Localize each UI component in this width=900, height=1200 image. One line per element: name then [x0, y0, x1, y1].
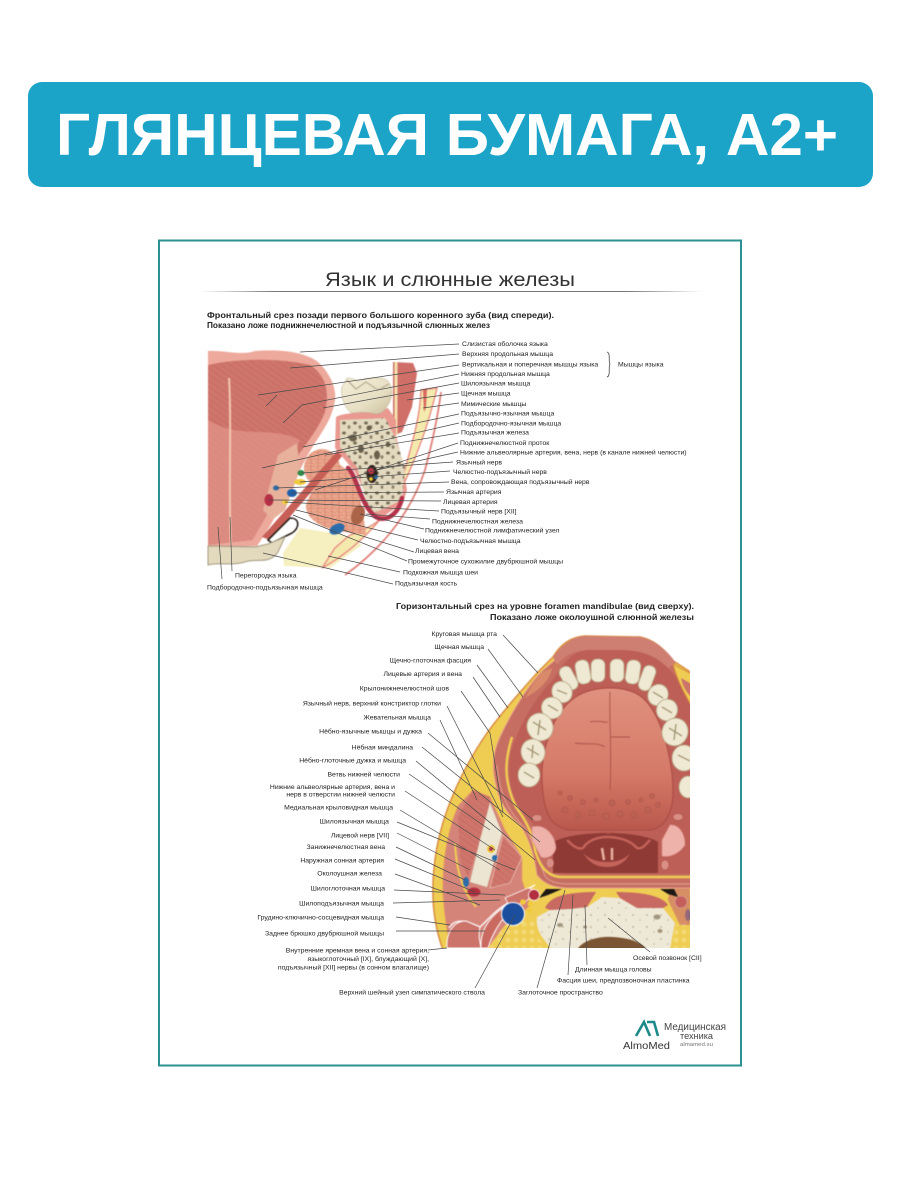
medial pterygoid — [490, 835, 522, 888]
cheek muscle — [393, 362, 417, 436]
labels: horizontal section: языкоглоточный [IX], блуждающий [X], — [307, 955, 429, 963]
labels: bottom of horizontal section — [518, 954, 702, 996]
labels: horizontal section: Крылонижнечелюстной шов — [360, 684, 449, 692]
labels: frontal section: Лицевая вена — [415, 548, 459, 555]
labels: horizontal section: Щечно-глоточная фасция — [390, 658, 471, 664]
spinal canal — [578, 936, 646, 948]
leader lines: frontal section — [218, 344, 459, 584]
muscle strip — [504, 887, 534, 905]
hyoid bone — [208, 537, 285, 565]
left cheek fat island — [525, 668, 552, 698]
right tonsil — [662, 825, 685, 856]
labels: frontal section: Шилоязычная мышца — [461, 380, 531, 388]
labels: bottom of horizontal section: Осевой позвонок [CII] — [633, 954, 702, 962]
labels: frontal section: Слизистая оболочка языка — [462, 340, 548, 348]
masseter — [458, 790, 490, 877]
labels: horizontal section: Нёбно-глоточные дужка и мышца — [299, 756, 406, 764]
left tonsil — [532, 826, 556, 858]
right cheek fat island — [672, 663, 690, 705]
labels: frontal section: Поднижнечелюстной проток — [460, 439, 550, 447]
labels: frontal section: Поднижнечелюстной лимфатический узел — [425, 526, 559, 534]
mylohyoid — [262, 442, 350, 540]
labels: frontal section: Лицевая артерия — [443, 499, 498, 506]
fat at carotid sheath — [488, 918, 548, 948]
carotid sheath vessels — [502, 902, 524, 926]
labels: frontal section: Щечная мышца — [461, 390, 511, 398]
labels: frontal section: Вена, сопровождающая подъязычный нерв — [451, 478, 590, 486]
labels: bottom of horizontal section: Длинная мышца головы — [575, 966, 652, 974]
poster title: Язык и слюнные железы — [325, 269, 575, 291]
heading: horizontal section: Горизонтальный срез на уровне foramen mandibulae (вид сверху). — [396, 602, 694, 611]
septum — [229, 378, 231, 545]
labels: horizontal section: Щечная мышца — [434, 644, 484, 651]
labels: frontal section: Подъязычная железа — [461, 430, 529, 436]
mandibular canal — [366, 465, 378, 483]
red muscle curve — [348, 468, 402, 519]
labels: horizontal section: Язычный нерв, верхний констриктор глотки — [303, 700, 441, 708]
poster frame — [159, 240, 741, 1066]
labels: horizontal section: Нёбная миндалина — [352, 744, 413, 752]
brace: tongue muscles — [607, 352, 664, 377]
labels: horizontal section: Жевательная мышца — [364, 714, 431, 722]
labels: frontal section: Промежуточное сухожилие двубрюшной мышцы — [408, 558, 563, 566]
cream subcutaneous band — [322, 388, 437, 568]
labels: frontal section — [207, 340, 687, 592]
heading: frontal section — [207, 311, 554, 330]
labels: horizontal section: Круговая мышца рта — [431, 631, 497, 638]
labels: horizontal section: Внутренние яремная вена и сонная артерия, — [286, 948, 429, 954]
logo: AlmaMed — [623, 1022, 726, 1052]
labels: bottom of horizontal section: Фасция шеи, предпозвоночная пластинка — [557, 978, 690, 984]
retromandibular vein and external carotid — [463, 877, 469, 887]
platysma stripe — [345, 392, 441, 575]
mandibular ramus — [470, 803, 502, 887]
pale yellow submental fat — [283, 528, 362, 568]
tongue — [542, 688, 673, 830]
banner heading: ГЛЯНЦЕВАЯ БУМАГА, А2+ — [56, 102, 838, 168]
labels: horizontal section: Нёбно-язычные мышцы и дужка — [319, 728, 422, 736]
labels: horizontal section: Шилоподъязычная мышца — [299, 900, 384, 908]
illustration: horizontal section, view from above — [433, 636, 697, 950]
logo: AlmaMed: техника — [680, 1031, 714, 1042]
labels: frontal section: Вертикальная и поперечная мышцы языка — [462, 362, 598, 368]
lip — [553, 636, 676, 668]
vertebra pores — [557, 914, 662, 933]
labels: horizontal section: Лицевой нерв [VII] — [331, 832, 389, 840]
vertebra C2 — [537, 897, 675, 950]
labels: frontal section: Челюстно-подъязычный нерв — [453, 468, 547, 476]
labels: horizontal section — [257, 631, 497, 996]
buccal muscle wall — [493, 639, 695, 888]
labels: frontal section: Подъязычный нерв [XII] — [441, 508, 517, 516]
labels: bottom of horizontal section: Заглоточное пространство — [518, 990, 603, 996]
illustration: frontal section of tongue and jaw — [208, 350, 441, 575]
facial vein — [328, 521, 346, 537]
labels: frontal section: Верхняя продольная мышца — [462, 351, 553, 358]
tooth crown — [342, 378, 392, 414]
labels: frontal section: Подъязычная кость — [395, 580, 458, 588]
sublingual gland — [304, 449, 340, 487]
labels: horizontal section: Околоушная железа — [317, 870, 382, 878]
parotid and deep neck muscles — [443, 790, 530, 948]
logo: AlmaMed: AlmoMed — [623, 1040, 670, 1052]
teeth — [518, 659, 697, 798]
lingual vessel bed — [263, 443, 300, 520]
prevertebral muscles — [545, 892, 596, 910]
labels: frontal section: Язычный нерв — [456, 458, 502, 466]
tongue papillae — [558, 791, 660, 819]
leader lines: horizontal section — [393, 635, 650, 988]
icon: logo mark — [636, 1022, 658, 1036]
labels: frontal section: Язычная артерия — [446, 489, 502, 496]
retropharyngeal dark spaces — [539, 889, 562, 898]
bone pores — [349, 426, 390, 460]
tongue muscle — [208, 360, 327, 545]
logo: AlmaMed: Медицинская — [664, 1022, 726, 1033]
heading: frontal section: Фронтальный срез позади первого большого коренного зуба (вид спереди). — [207, 311, 554, 320]
labels: frontal section: Поднижнечелюстная железа — [432, 518, 523, 526]
labels: horizontal section: Занижнечелюстная вена — [307, 844, 385, 851]
skin and subcutaneous fat — [433, 636, 695, 950]
labels: frontal section: Подбородочно-подъязычная мышца — [207, 584, 323, 592]
soft palate — [567, 837, 650, 849]
labels: horizontal section: Медиальная крыловидная мышца — [284, 804, 393, 812]
labels: horizontal section: Шилоязычная мышца — [320, 818, 389, 826]
mimic muscle — [423, 388, 427, 412]
gum — [335, 408, 407, 520]
labels: horizontal section: Ветвь нижней челюсти — [327, 770, 400, 778]
epiglottis — [602, 848, 612, 860]
white fascia separating neck muscles — [449, 885, 535, 928]
wall fibres — [497, 765, 695, 884]
labels: frontal section: Челюстно-подъязычная мышца — [420, 538, 521, 545]
sternocleidomastoid — [447, 921, 481, 948]
parotid duct curve — [455, 843, 476, 907]
intermediate tendon — [268, 518, 298, 543]
logo: AlmaMed: almamed.su — [680, 1042, 713, 1048]
tooth fissures — [524, 690, 690, 778]
inner yellow fascia line — [506, 737, 695, 877]
labels: horizontal section: Грудино-ключично-сосцевидная мышца — [257, 914, 384, 922]
tongue median groove — [575, 692, 630, 790]
labels: frontal section: Нижние альвеолярные артерия, вена, нерв (в канале нижней челюсти) — [460, 448, 687, 456]
labels: horizontal section: Нижние альвеолярные артерия, вена и — [270, 784, 395, 791]
inferior alveolar bundle — [487, 845, 498, 861]
heading: horizontal section: Показано ложе околоушной слюнной железы — [490, 613, 694, 622]
palatal arch ovals — [532, 814, 683, 870]
heading: horizontal section — [396, 602, 694, 622]
vessels — [298, 470, 304, 476]
labels: horizontal section: Лицевые артерия и вена — [384, 671, 462, 678]
labels: horizontal section: Заднее брюшко двубрюшной мышцы — [265, 930, 384, 938]
labels: horizontal section: нерв в отверстии нижней челюсти — [286, 790, 395, 798]
labels: horizontal section: Наружная сонная артерия — [300, 858, 384, 864]
labels: horizontal section: подъязычный [XII] нервы (в сонном влагалище) — [278, 964, 429, 972]
labels: frontal section: Подкожная мышца шеи — [403, 570, 478, 576]
mandible bone — [340, 418, 405, 515]
tongue mucosa — [208, 350, 335, 548]
oral cavity floor — [509, 650, 695, 874]
heading: frontal section: Показано ложе поднижнечелюстной и подъязычной слюнных желез — [207, 321, 490, 330]
submandibular gland — [306, 465, 366, 535]
labels: frontal section: Нижняя продольная мышца — [461, 371, 550, 378]
posterior belly of digastric — [480, 908, 504, 948]
labels: frontal section: Мимические мышцы — [461, 401, 526, 408]
banner: glossy paper A2+ — [28, 82, 873, 187]
labels: frontal section: Подъязычно-язычная мышца — [461, 410, 554, 418]
lymph node — [348, 503, 368, 527]
labels: horizontal section: Шилоглоточная мышца — [311, 886, 385, 892]
labels: frontal section: Подбородочно-язычная мышца — [461, 420, 561, 428]
labels: horizontal section: Верхний шейный узел симпатического ствола — [339, 988, 485, 996]
oropharynx — [553, 833, 658, 873]
labels: frontal section: Перегородка языка — [235, 572, 297, 580]
brace: tongue muscles: Мышцы языка — [618, 362, 664, 368]
